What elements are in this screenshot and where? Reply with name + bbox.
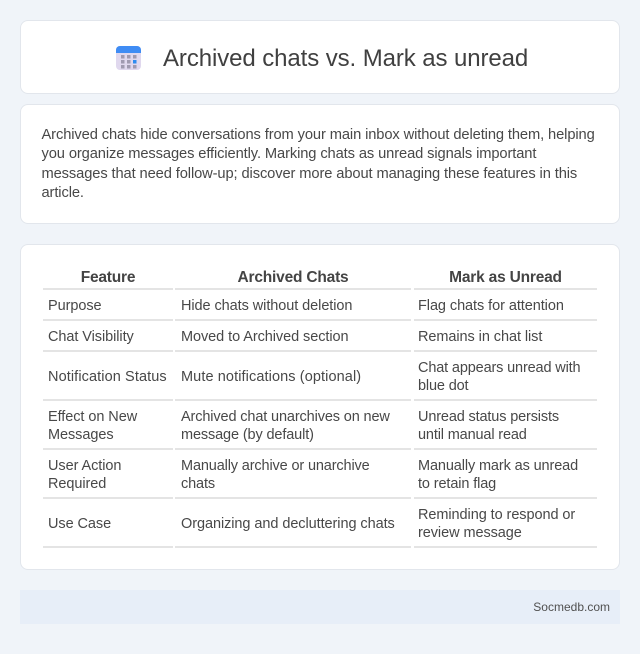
panel: title header xyxy=(20,20,620,94)
row: User Action Required xyxy=(48,458,121,492)
row: User Action Required: User Action xyxy=(48,458,121,474)
comparison table: Flag chats for attention xyxy=(418,298,564,314)
intro text: you organize messages efficiently. Marking chats as unread signals important xyxy=(42,146,536,162)
comparison table: Remains in chat list xyxy=(418,329,542,345)
comparison table: blue dot xyxy=(418,378,468,394)
title: Archived chats vs. Mark as unread xyxy=(163,45,528,72)
column header: Archived Chats: Archived Chats xyxy=(238,269,348,286)
intro text: messages that need follow-up; discover more about managing these features in this xyxy=(42,166,577,182)
comparison table: Manually mark as unread xyxy=(418,458,578,474)
column header: Feature: Feature xyxy=(81,269,135,286)
column header: Mark as Unread: Mark as Unread xyxy=(449,269,562,286)
comparison table: message (by default) xyxy=(181,427,314,443)
intro text: Archived chats hide conversations from your main inbox without deleting them, helping xyxy=(42,127,595,143)
row: Use Case: Use Case xyxy=(48,516,111,532)
comparison table: Unread status persists xyxy=(418,409,559,425)
row: Notification Status: Notification Status xyxy=(48,369,167,385)
footer bar xyxy=(20,590,620,624)
comparison table: Moved to Archived section xyxy=(181,329,349,345)
row: User Action Required: Required xyxy=(48,476,106,492)
comparison table: Chat appears unread with xyxy=(418,360,580,376)
comparison table: chats xyxy=(181,476,215,492)
row: Effect on New Messages: Effect on New xyxy=(48,409,137,425)
comparison table: until manual read xyxy=(418,427,527,443)
comparison table: to retain flag xyxy=(418,476,496,492)
footer source text: Socmedb.com xyxy=(533,600,610,614)
comparison table: Organizing and decluttering chats xyxy=(181,516,395,532)
comparison table: Hide chats without deletion xyxy=(181,298,352,314)
panel: introduction xyxy=(20,104,620,224)
intro text: article. xyxy=(42,185,84,201)
row: Effect on New Messages xyxy=(48,409,138,443)
intro text xyxy=(42,127,595,201)
row: Purpose: Purpose xyxy=(48,298,102,314)
row: Chat Visibility: Chat Visibility xyxy=(48,329,134,345)
panel: comparison table xyxy=(20,244,620,570)
comparison table: Manually archive or unarchive xyxy=(181,458,370,474)
comparison table: Reminding to respond or xyxy=(418,507,575,523)
icon: calendar xyxy=(116,46,141,70)
comparison table: Archived chat unarchives on new xyxy=(181,409,390,425)
comparison table: Mute notifications (optional) xyxy=(181,369,361,385)
row: Effect on New Messages: Messages xyxy=(48,427,114,443)
comparison table: review message xyxy=(418,525,522,541)
